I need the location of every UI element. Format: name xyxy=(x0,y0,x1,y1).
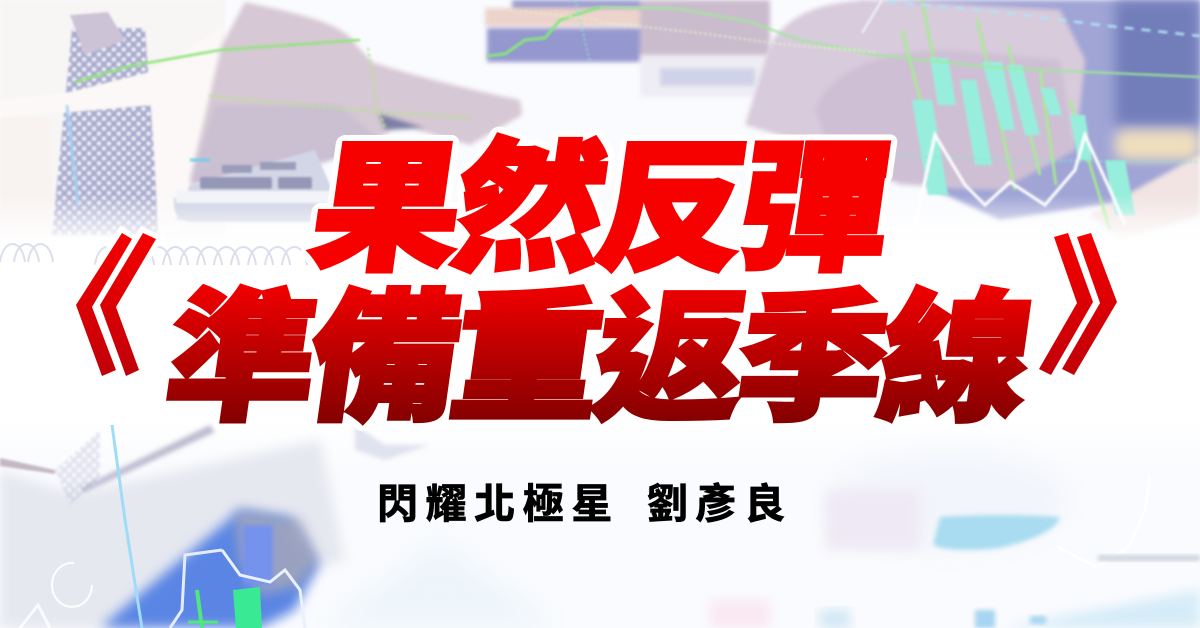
left double angle bracket xyxy=(76,233,156,376)
title line 1: 果然反彈: 果然反彈 xyxy=(302,130,900,288)
calculator xyxy=(174,150,345,222)
title line 1: 果然反彈: 果然反彈 xyxy=(302,130,900,288)
monitor top centre xyxy=(485,0,770,97)
blurred chart lower-right xyxy=(320,450,1200,628)
spiral binding xyxy=(0,244,307,265)
title line 2: 《準備重返季線》: 準備重返季線 xyxy=(157,280,1041,438)
byline: 閃耀北極星 xyxy=(377,481,620,527)
shirt and tie xyxy=(0,0,225,240)
pen and chart lower-left xyxy=(20,425,318,628)
hand on calculator xyxy=(190,2,522,185)
right hand xyxy=(745,0,1200,240)
white fade across the middle xyxy=(0,195,1200,245)
title line 2: 《準備重返季線》: 準備重返季線 xyxy=(157,280,1041,438)
author: 劉彥良 xyxy=(647,481,793,527)
notebook lower-left xyxy=(0,425,430,628)
title block xyxy=(76,130,1117,438)
candlesticks xyxy=(600,0,1200,270)
right double angle bracket xyxy=(1039,233,1117,375)
green chart lines left xyxy=(67,0,600,205)
title line 2: 《準備重返季線》 xyxy=(76,233,1117,438)
